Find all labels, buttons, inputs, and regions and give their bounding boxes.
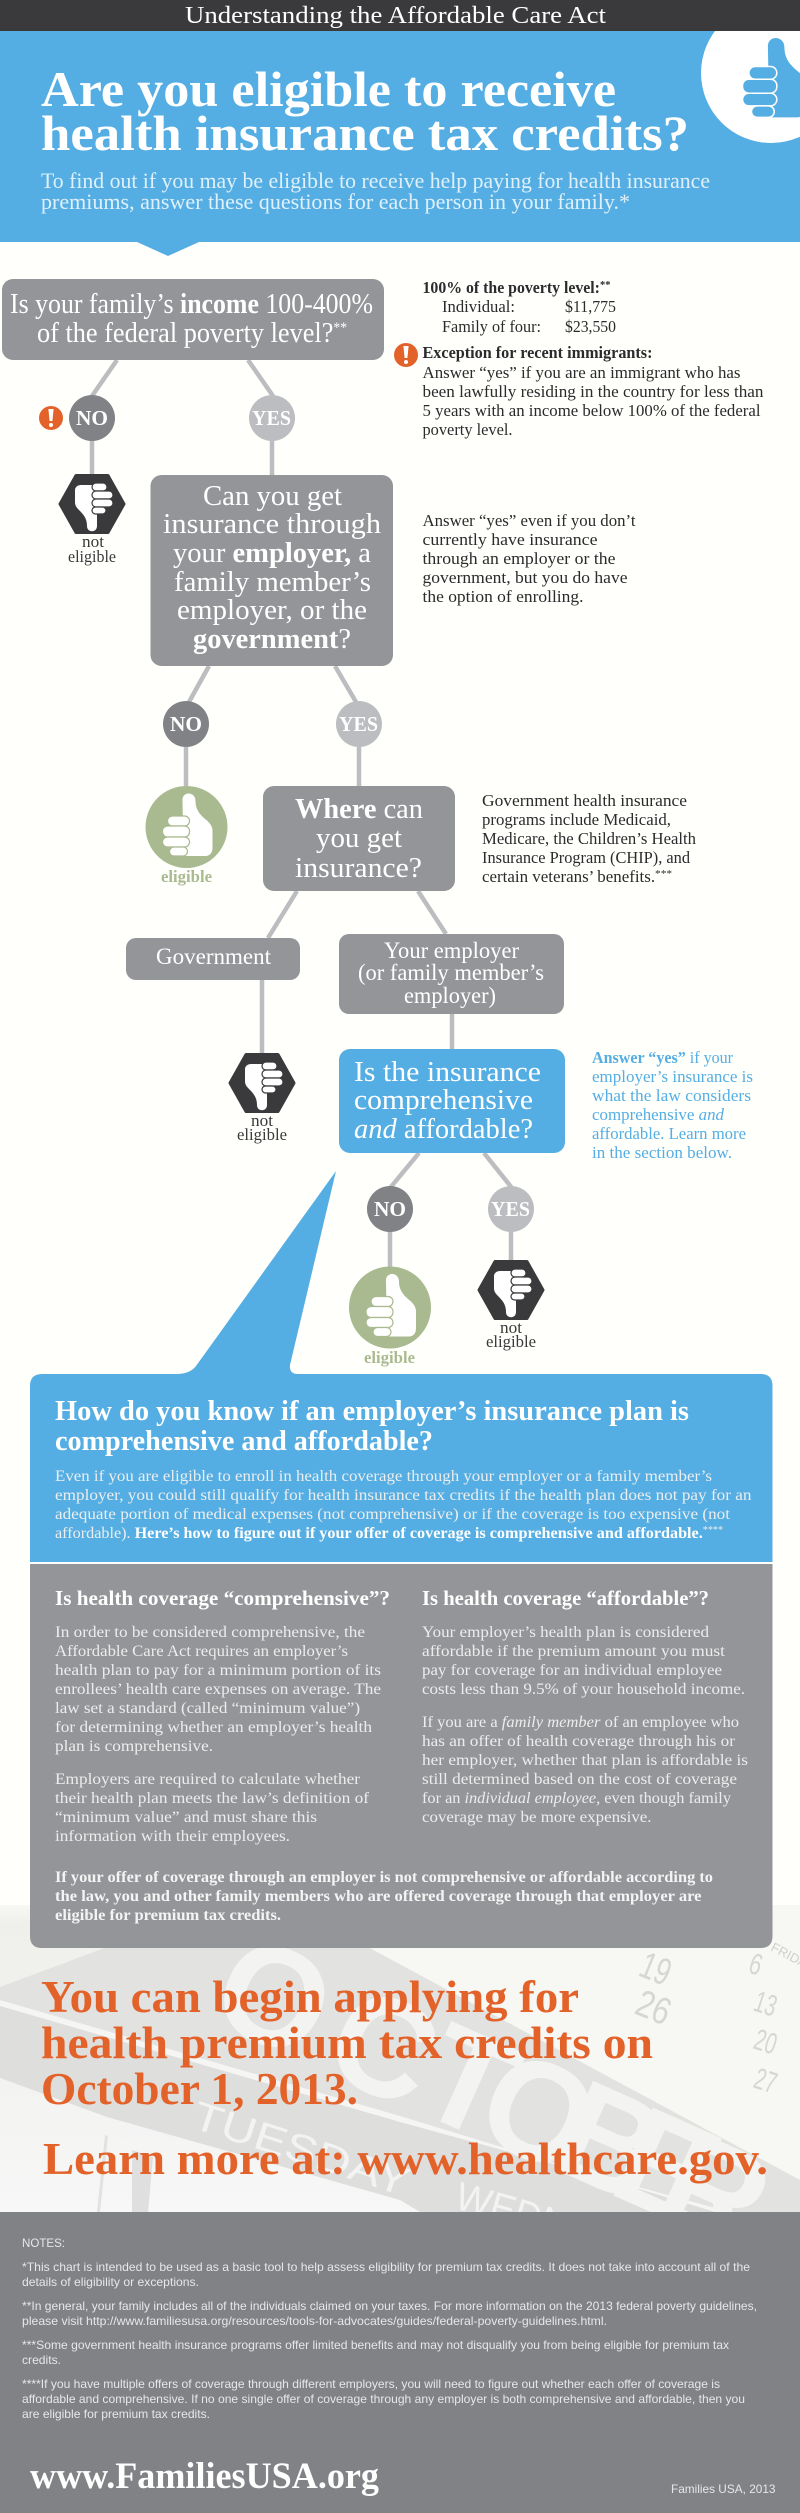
conclusion: the law, you and other family members who are offered coverage through that employer are	[55, 1888, 702, 1905]
answer: yes	[488, 1186, 534, 1232]
calendar photo background	[0, 1905, 800, 2212]
intro paragraph: Even if you are eligible to enroll in health coverage through your employer or a family member’s	[55, 1468, 712, 1485]
note: answer yes if comprehensive: Answer “yes” if your	[592, 1048, 733, 1067]
question: where can you get insurance	[263, 786, 455, 891]
note: government programs: Government health insurance	[482, 791, 687, 810]
column: comprehensive: for determining whether an employer’s health	[55, 1719, 372, 1736]
title: Are you eligible to receive	[41, 61, 616, 117]
icon: alert no	[39, 406, 63, 430]
column: comprehensive: enrollees’ health care expenses on average. The	[55, 1681, 381, 1698]
option: government: Government	[156, 944, 272, 969]
icon: header thumbs up	[701, 3, 800, 143]
call to action: You can begin applying for	[41, 1972, 579, 2022]
call to action: health premium tax credits on	[41, 2018, 653, 2068]
question: income: Is your family’s income 100-400%	[10, 288, 373, 320]
column: comprehensive: In order to be considered comprehensive, the	[55, 1624, 365, 1641]
notes	[22, 2236, 757, 2421]
icon: not eligible 3	[479, 1262, 543, 1351]
column: comprehensive: Affordable Care Act requires an employer’s	[55, 1643, 348, 1660]
note: government programs: certain veterans’ benefits.	[482, 867, 651, 886]
calendar photo background: 26	[630, 1982, 677, 2034]
column: comprehensive: information with their employees.	[55, 1828, 290, 1845]
column: comprehensive: their health plan meets the law’s definition of	[55, 1790, 370, 1807]
question: income	[2, 279, 384, 360]
calendar photo background: O	[458, 2018, 621, 2205]
intro paragraph: employer, you could still qualify for health insurance tax credits if the health plan does not pay for an	[55, 1487, 752, 1504]
question: employer or government	[150, 475, 393, 666]
note: answer yes even if: currently have insurance	[422, 530, 598, 549]
title: health insurance tax credits?	[41, 105, 689, 161]
option: government	[126, 938, 300, 980]
heading: how do you know: comprehensive and affordable?	[55, 1426, 433, 1457]
title	[41, 61, 689, 161]
poverty level info: $11,775	[565, 297, 616, 316]
answer: yes	[336, 701, 382, 747]
calendar photo background: R	[637, 2099, 794, 2284]
icon: eligible 2	[349, 1266, 431, 1367]
calendar photo background: T	[398, 1992, 540, 2170]
intro paragraph	[55, 1468, 752, 1542]
call to action: October 1, 2013.	[41, 2064, 358, 2114]
option: your employer	[339, 934, 564, 1014]
calendar photo background: 27	[750, 2062, 781, 2100]
column: affordable: for an individual employee, even though family	[422, 1790, 731, 1807]
note: answer yes if comprehensive: comprehensive and	[592, 1105, 725, 1124]
exception for recent immigrants: Exception for recent immigrants:	[422, 343, 652, 362]
note: answer yes even if: government, but you do have	[422, 568, 628, 587]
column: affordable: affordable if the premium amount you must	[422, 1643, 726, 1660]
icon: not eligible 3: not	[500, 1318, 522, 1337]
notes: affordable and comprehensive. If no one single offer of coverage through any employer is both comprehensive and affordable, then you	[22, 2392, 745, 2406]
poverty level info: Family of four:	[442, 317, 541, 336]
calendar photo background: WEDNES	[451, 2174, 621, 2262]
intro paragraph: ****	[703, 1525, 723, 1536]
column: affordable	[422, 1586, 748, 1826]
calendar photo background: E	[593, 2076, 742, 2257]
notes: are eligible for premium tax credits.	[22, 2407, 210, 2421]
answer: no: NO	[170, 712, 202, 736]
note: answer yes if comprehensive: affordable. Learn more	[592, 1124, 746, 1143]
column: comprehensive: Employers are required to calculate whether	[55, 1771, 361, 1788]
intro text	[41, 168, 710, 214]
column: comprehensive: health plan to pay for a minimum portion of its	[55, 1662, 381, 1679]
note: government programs: Medicare, the Children’s Health	[482, 829, 697, 848]
column: affordable: has an offer of health coverage through his or	[422, 1733, 736, 1750]
calendar photo background: B	[533, 2049, 690, 2234]
exception for recent immigrants: poverty level.	[422, 420, 512, 439]
notes: please visit http://www.familiesusa.org/resources/tools-for-advocates/guides/federal-poverty-guidelines.html.	[22, 2314, 607, 2328]
icon: not eligible 1: not	[82, 532, 104, 551]
icon: eligible 2: eligible	[364, 1348, 415, 1367]
conclusion	[55, 1869, 713, 1924]
icon: eligible 1	[146, 786, 228, 886]
question: comprehensive and affordable: and affordable?	[354, 1113, 533, 1145]
panel: comprehensive and affordable definitions	[30, 1564, 772, 1948]
poverty level info: $23,550	[565, 317, 616, 336]
question: where can you get insurance: you get	[316, 822, 402, 854]
notes: credits.	[22, 2353, 61, 2367]
question: employer or government: government?	[193, 623, 351, 655]
top header bar	[0, 0, 800, 31]
icon: eligible 1: eligible	[161, 867, 212, 886]
notes: ****If you have multiple offers of coverage through different employers, you will need to figure out whether each offer of coverage is	[22, 2377, 720, 2391]
answer: no	[163, 701, 209, 747]
exception for recent immigrants: been lawfully residing in the country for less than	[422, 382, 764, 401]
note: government programs: programs include Medicaid,	[482, 810, 671, 829]
calendar photo background: 6	[745, 1947, 766, 1982]
option: your employer: (or family member’s	[358, 960, 544, 985]
icon: alert exception	[394, 343, 418, 367]
question: comprehensive and affordable	[339, 1049, 565, 1153]
note: answer yes even if: Answer “yes” even if you don’t	[422, 511, 636, 530]
answer: no	[69, 395, 115, 441]
notes: **In general, your family includes all of the individuals claimed on your taxes. For more information on the 2013 federal poverty guidelines,	[22, 2299, 757, 2313]
note: answer yes if comprehensive: what the law considers	[592, 1086, 751, 1105]
footer panel	[0, 2212, 800, 2513]
icon: not eligible 1	[60, 476, 124, 566]
question: comprehensive and affordable: comprehensive	[354, 1084, 533, 1116]
intro paragraph: affordable). Here’s how to figure out if your offer of coverage is comprehensive and affordable.	[55, 1525, 697, 1542]
exception for recent immigrants: 5 years with an income below 100% of the federal	[422, 401, 761, 420]
top header bar: Understanding the Affordable Care Act	[185, 3, 606, 29]
question: income: of the federal poverty level?	[37, 317, 364, 349]
panel: how do you know	[30, 1171, 772, 1562]
answer: yes: YES	[252, 406, 291, 430]
poverty level info: **	[600, 279, 611, 291]
column: affordable: costs less than 9.5% of your household income.	[422, 1681, 745, 1698]
poverty level info	[422, 278, 616, 336]
call to action	[41, 1972, 768, 2184]
answer: no: NO	[76, 406, 108, 430]
note: answer yes if comprehensive	[592, 1048, 753, 1162]
question: employer or government: employer, or the	[177, 594, 367, 626]
website: www.FamiliesUSA.org	[30, 2456, 379, 2497]
note: answer yes even if	[422, 511, 636, 606]
calendar photo background: C	[306, 1954, 463, 2139]
answer: yes: YES	[339, 712, 378, 736]
note: answer yes if comprehensive: in the section below.	[592, 1143, 732, 1162]
icon: not eligible 2: eligible	[237, 1125, 287, 1144]
column: affordable: Your employer’s health plan is considered	[422, 1624, 709, 1641]
conclusion: eligible for premium tax credits.	[55, 1907, 281, 1924]
answer: yes	[249, 395, 295, 441]
calendar photo background: 13	[750, 1985, 781, 2023]
calendar photo background: O	[193, 1903, 356, 2090]
exception for recent immigrants: Answer “yes” if you are an immigrant who has	[422, 363, 740, 382]
column: affordable: her employer, whether that plan is affordable is	[422, 1752, 748, 1769]
option: your employer: Your employer	[384, 938, 519, 963]
icon: not eligible 3: eligible	[486, 1332, 536, 1351]
notes: details of eligibility or exceptions.	[22, 2275, 199, 2289]
note: government programs: Insurance Program (CHIP), and	[482, 848, 691, 867]
column: affordable: Is health coverage “affordable”?	[422, 1586, 709, 1610]
calendar photo background: 20	[750, 2023, 781, 2061]
hero banner	[0, 31, 800, 256]
intro paragraph: adequate portion of medical expenses (not comprehensive) or if the coverage is too expensive (not	[55, 1506, 731, 1523]
column: affordable: If you are a family member of an employee who	[422, 1714, 739, 1731]
column: affordable: pay for coverage for an individual employee	[422, 1662, 722, 1679]
poverty level info: Individual:	[442, 297, 515, 316]
question: where can you get insurance: insurance?	[295, 852, 422, 884]
column: comprehensive: Is health coverage “comprehensive”?	[55, 1586, 390, 1610]
column: comprehensive	[55, 1586, 390, 1845]
icon: not eligible 2	[230, 1054, 294, 1144]
exception for recent immigrants	[422, 343, 764, 439]
column: affordable: coverage may be more expensive.	[422, 1809, 652, 1826]
column: comprehensive: plan is comprehensive.	[55, 1738, 213, 1755]
intro text: premiums, answer these questions for each person in your family.*	[41, 189, 630, 214]
credit: Families USA, 2013	[671, 2482, 776, 2496]
option: your employer: employer)	[404, 983, 496, 1008]
call to action: Learn more at: www.healthcare.gov.	[43, 2134, 768, 2184]
notes: NOTES:	[22, 2236, 65, 2250]
heading: how do you know	[55, 1396, 689, 1457]
poverty level info: 100% of the poverty level:	[422, 278, 608, 297]
column: affordable: still determined based on the cost of coverage	[422, 1771, 737, 1788]
intro text: To find out if you may be eligible to receive help paying for health insurance	[41, 168, 710, 193]
icon: not eligible 2: not	[251, 1111, 273, 1130]
question: employer or government: insurance through	[163, 508, 382, 540]
note: answer yes even if: through an employer or the	[422, 549, 616, 568]
question: employer or government: your employer, a	[173, 537, 371, 569]
note: government programs	[482, 791, 697, 886]
notes: ***Some government health insurance programs offer limited benefits and may not disqualify you from being eligible for premium tax	[22, 2338, 729, 2352]
notes: *This chart is intended to be used as a basic tool to help assess eligibility for premium tax credits. It does not take into account all of the	[22, 2260, 750, 2274]
connector lines	[92, 360, 512, 1267]
note: government programs: ***	[655, 868, 672, 880]
question: income: **	[333, 320, 347, 336]
question: employer or government: Can you get	[203, 480, 342, 512]
answer: no	[367, 1186, 413, 1232]
heading: how do you know: How do you know if an employer’s insurance plan is	[55, 1396, 689, 1427]
answer: no: NO	[374, 1197, 406, 1221]
question: where can you get insurance: Where can	[295, 793, 423, 825]
question: employer or government: family member’s	[174, 566, 371, 598]
answer: yes: YES	[491, 1197, 530, 1221]
column: comprehensive: law set a standard (called “minimum value”)	[55, 1700, 360, 1717]
calendar photo background: TUESDAY	[187, 2094, 415, 2205]
banner pointer	[137, 242, 199, 256]
question: comprehensive and affordable: Is the insurance	[354, 1056, 541, 1088]
note: answer yes if comprehensive: employer’s insurance is	[592, 1067, 753, 1086]
conclusion: If your offer of coverage through an employer is not comprehensive or affordable according to	[55, 1869, 713, 1886]
note: answer yes even if: the option of enrolling.	[422, 587, 584, 606]
column: comprehensive: “minimum value” and must share this	[55, 1809, 317, 1826]
icon: not eligible 1: eligible	[68, 547, 116, 566]
calendar photo background: 19	[634, 1944, 677, 1995]
